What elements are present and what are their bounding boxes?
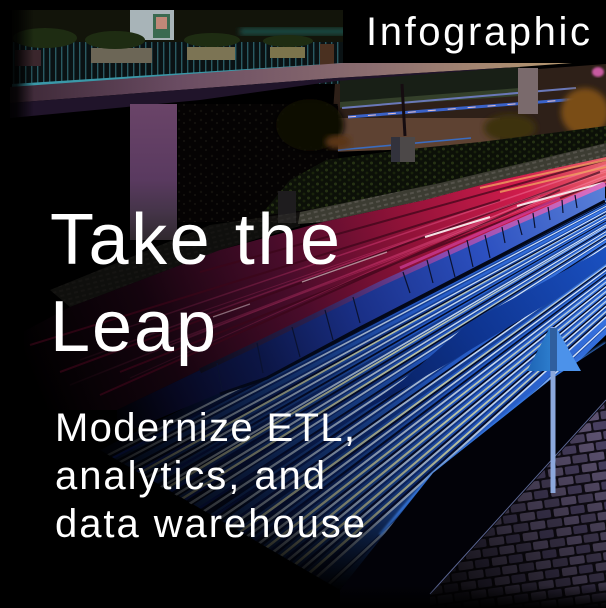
top edge band (0, 0, 606, 9)
subtitle: data warehouse (55, 502, 365, 546)
bridge railing (12, 42, 347, 84)
dark gaps between streaks (112, 50, 606, 576)
guard rail with light trails (328, 88, 591, 151)
right bridge pillar (518, 68, 538, 114)
sign right half (556, 327, 581, 371)
bridge deck front face (10, 63, 572, 103)
pavers (430, 402, 606, 608)
white-blue wedges (107, 50, 606, 584)
teal glow behind railing (240, 28, 350, 35)
road surface (17, 157, 606, 410)
pale tan wedges (138, 50, 606, 573)
concrete road barrier (117, 183, 605, 436)
infographic tag (343, 0, 606, 63)
triangular road sign on pole (527, 327, 581, 493)
embankment dark area (340, 343, 606, 608)
scene: overpass and background (10, 10, 606, 307)
red streaks (30, 160, 606, 395)
barrier segment joints (217, 195, 577, 390)
cobblestone pavement (430, 400, 606, 608)
dim stone wall at left (50, 212, 300, 307)
barrier shadow (220, 201, 605, 394)
subtitle: Modernize ETL, (55, 406, 355, 450)
sign pole (550, 327, 556, 493)
bridge underside (10, 67, 518, 118)
glowing lower edge (380, 343, 606, 535)
blue wedges (112, 50, 606, 590)
kiosk with poster (130, 10, 174, 40)
curb line (430, 400, 606, 594)
blue light streaks (90, 50, 606, 592)
title: Leap (50, 287, 216, 367)
roadside hedge (260, 126, 606, 216)
base blue (100, 50, 606, 590)
barrier face (117, 183, 605, 436)
left bridge pillar (130, 104, 177, 240)
stone retaining wall (298, 143, 606, 224)
dark shrubs under bridge (178, 104, 338, 222)
title: Take the (50, 200, 340, 280)
subtitle (55, 406, 365, 546)
sign back band (550, 328, 557, 371)
foreground tree (276, 84, 405, 151)
dark blue lane (347, 248, 606, 420)
barrier lit top edge (200, 184, 605, 371)
tag label: Infographic (366, 10, 590, 54)
pavement shading (430, 402, 606, 608)
subtitle: analytics, and (55, 454, 325, 498)
planter boxes (15, 44, 334, 70)
title (50, 200, 340, 367)
left edge fade (0, 0, 34, 608)
red tail-light road (17, 157, 606, 410)
distant grassy bank (340, 88, 520, 108)
bottom edge fade (0, 585, 606, 608)
streak end fade (90, 510, 440, 592)
sign left half (527, 327, 550, 371)
planter foliage (13, 28, 313, 49)
foliage behind the bridge (12, 10, 347, 44)
white lane dashes (213, 183, 603, 317)
utility box (391, 137, 415, 162)
small grey box near wall (278, 191, 296, 223)
tag background (343, 0, 606, 63)
middle distance road (330, 64, 606, 152)
far right trees with orange light (484, 67, 606, 142)
railing teal bottom light (12, 63, 342, 87)
